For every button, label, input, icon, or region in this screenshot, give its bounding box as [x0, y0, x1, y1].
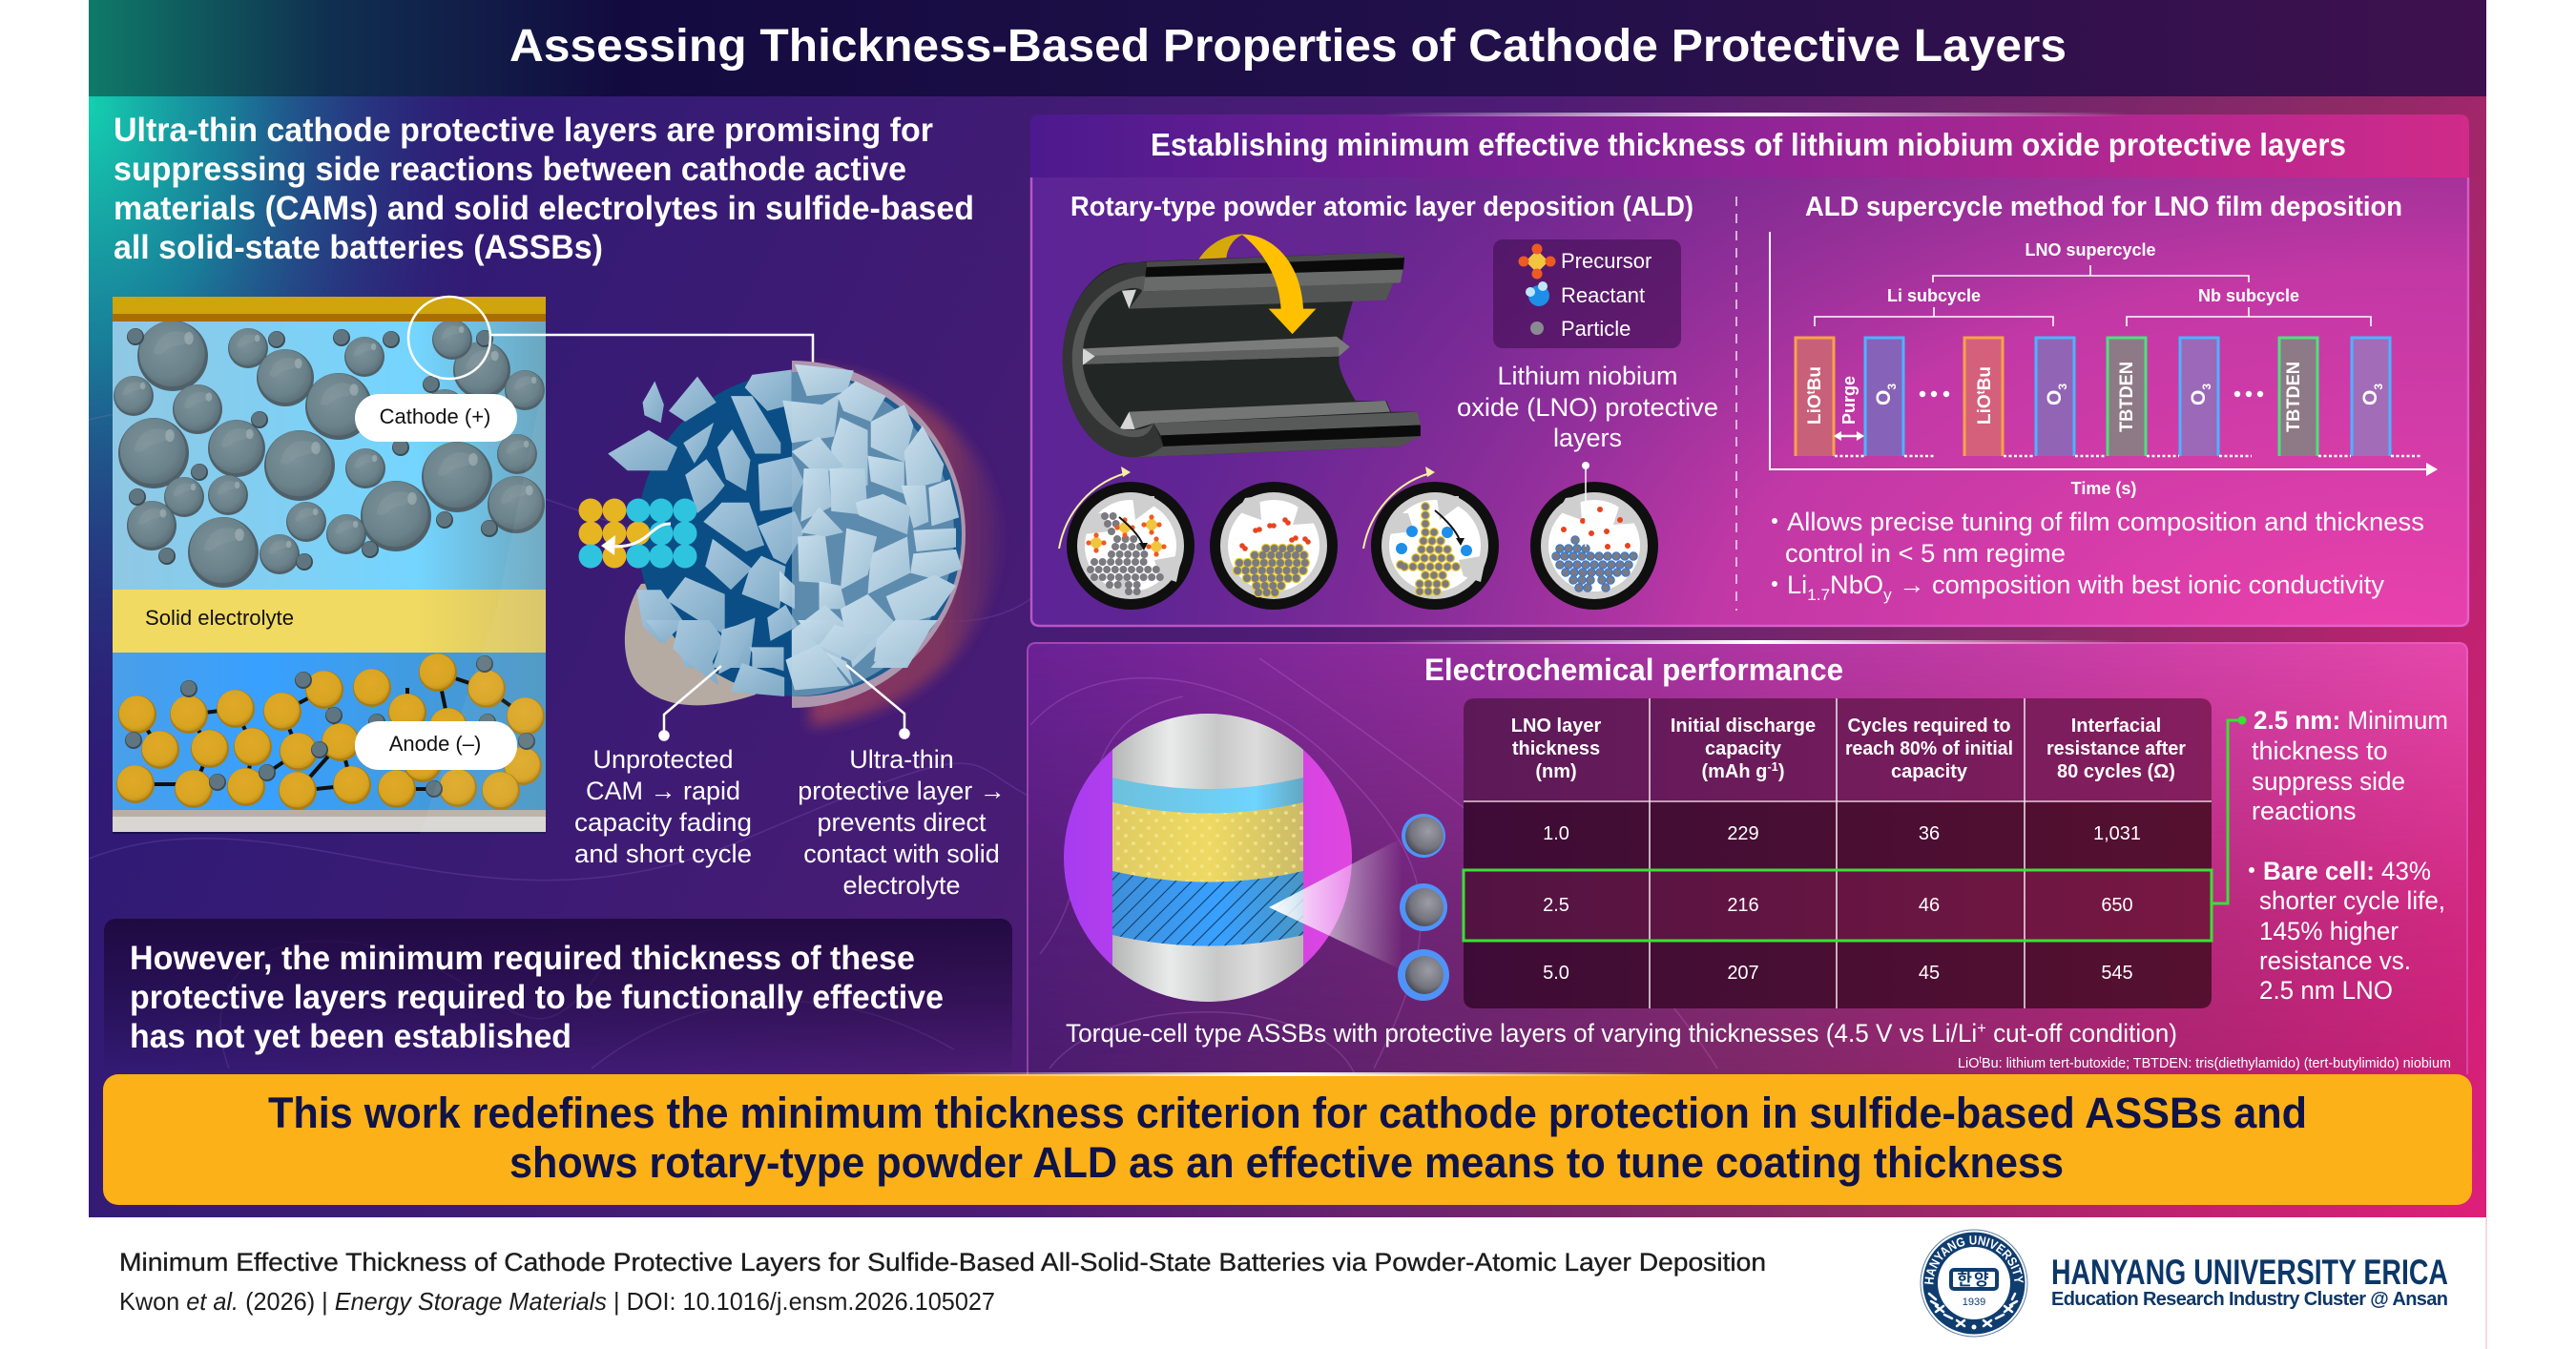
highlight row [1464, 870, 2212, 941]
table header: Cycles required to [1847, 716, 2011, 737]
logo: wordmark: Education Research Industry Cluster @ Ansan [2051, 1289, 2448, 1310]
bar labels: LiO [1805, 394, 1825, 425]
bar labels: O [2188, 390, 2210, 405]
table header [1511, 716, 2186, 782]
particle: 5.0 nm [1398, 949, 1449, 1001]
bar labels: 3 [1885, 384, 1899, 390]
shards [608, 370, 804, 668]
ALD supercycle chart: Nb subcycle [2198, 286, 2299, 305]
citation: Kwon et al. (2026) | Energy Storage Materials | DOI: 10.1016/j.ensm.2026.105027 [119, 1287, 995, 1316]
brackets [1815, 265, 2371, 326]
table header: (mAh g [1701, 761, 1767, 782]
callout leader lines [660, 665, 908, 740]
label: anode: Anode (–) [389, 732, 481, 756]
bar labels: 3 [2200, 384, 2213, 390]
table header: capacity [1705, 738, 1782, 759]
table header: -1 [1767, 759, 1778, 774]
caption: cut-off condition) [1986, 1019, 2177, 1048]
intro text [114, 112, 974, 266]
caption: + [1977, 1019, 1986, 1037]
table header: capacity [1891, 761, 1968, 782]
table rows: 229 [1727, 823, 1759, 844]
ALD bullets: control in < 5 nm regime [1785, 539, 2066, 568]
green connector [2212, 716, 2246, 903]
title: Assessing Thickness-Based Properties of Cathode Protective Layers [509, 21, 2067, 72]
cathode particles [114, 320, 545, 588]
drum 4: LNO coated [1530, 462, 1658, 610]
callout: ultra-thin layer [798, 745, 1006, 900]
bar labels: 3 [2056, 384, 2069, 390]
panel: knowledge gap: protective layers required to be functionally effective [130, 979, 944, 1016]
logo: wordmark: HANYANG UNIVERSITY ERICA [2051, 1253, 2448, 1292]
label: anode [355, 721, 517, 770]
table header: (nm) [1535, 761, 1577, 782]
particle: 1.0 nm [1402, 814, 1445, 858]
citation [119, 1248, 1766, 1316]
bar labels: Bu [1805, 366, 1825, 390]
table rows: 650 [2101, 895, 2133, 916]
logo: university seal: 1939 [1963, 1297, 1985, 1308]
pulse bars [1796, 338, 2390, 456]
callout: unprotected CAM: CAM → rapid [586, 777, 740, 805]
finding: 2.5 nm: reactions [2252, 797, 2357, 825]
panel: establishing minimum thickness [1030, 113, 2469, 627]
logo: university seal: HANYANG UNIVERSITY [1924, 1235, 2024, 1284]
LNO label: oxide (LNO) protective [1457, 393, 1718, 422]
table rows: 545 [2101, 963, 2133, 984]
panel heading: Electrochemical performance [1424, 653, 1843, 687]
table header: LNO layer [1511, 716, 1601, 737]
legend [1493, 239, 1681, 348]
lattice atoms [578, 498, 696, 569]
icon: reactant [1526, 281, 1549, 306]
caption: Torque-cell type ASSBs with protective layers of varying thicknesses (4.5 V vs Li/Li [1066, 1019, 2006, 1048]
finding: bare cell: 145% higher [2259, 917, 2399, 945]
logo: university seal [1920, 1229, 2028, 1338]
table rows: 46 [1919, 895, 1940, 916]
table header: 80 cycles (Ω) [2057, 761, 2175, 782]
zoom cone [1269, 838, 1402, 970]
ALD bullets: → composition with best ionic conductivity [1892, 571, 2384, 599]
legend: Precursor [1561, 249, 1652, 273]
finding: 2.5 nm: suppress side [2252, 767, 2405, 796]
citation: Minimum Effective Thickness of Cathode Protective Layers for Sulfide-Based All-Solid-State Batteries via Powder-Atomic Layer Deposition [119, 1248, 1766, 1276]
finding: bare cell [2249, 857, 2445, 1005]
finding: bare cell: 2.5 nm LNO [2259, 976, 2393, 1005]
table rows: 5.0 [1543, 963, 1569, 984]
bar labels: Bu [1975, 366, 1995, 390]
table rows: 2.5 [1543, 895, 1569, 916]
abbreviations note: Bu: lithium tert-butoxide; TBTDEN: tris(diethylamido) (tert-butylimido) niobium [1982, 1055, 2451, 1071]
intro text: Ultra-thin cathode protective layers are promising for [114, 112, 933, 149]
LNO label: layers [1553, 424, 1622, 452]
table rows: 207 [1727, 963, 1759, 984]
LNO label: Lithium niobium [1497, 362, 1678, 390]
callout: ultra-thin layer: contact with solid [803, 840, 1000, 868]
bar labels: O [2044, 390, 2066, 405]
panel: knowledge gap [104, 919, 1012, 1074]
gas-flow arrow [1045, 359, 1415, 391]
table header: ) [1778, 761, 1785, 782]
table header: Initial discharge [1671, 716, 1816, 737]
panel: knowledge gap: has not yet been established [130, 1018, 571, 1055]
axes [1770, 232, 2438, 476]
background [89, 96, 2486, 1217]
finding: bare cell: resistance vs. [2259, 946, 2411, 975]
rotary reactor tube [1045, 234, 1421, 457]
conclusion banner: shows rotary-type powder ALD as an effective means to tune coating thickness [509, 1138, 2064, 1187]
callout: unprotected CAM: Unprotected [592, 745, 734, 774]
callout: ultra-thin layer: protective layer → [798, 777, 1006, 805]
bar labels: O [1873, 390, 1895, 405]
intro text: all solid-state batteries (ASSBs) [114, 229, 603, 266]
bar labels: Purge [1839, 376, 1859, 425]
ALD bullets [1772, 508, 2424, 604]
ellipses [1920, 391, 2263, 397]
torque cell illustration [1064, 706, 1449, 1011]
finding: 2.5 nm [2252, 706, 2448, 825]
table header: resistance after [2046, 738, 2186, 759]
anode particles [116, 654, 545, 810]
table header: reach 80% of initial [1845, 738, 2013, 759]
conclusion banner: This work redefines the minimum thickness criterion for cathode protection in sulfide-based ASSBs and [268, 1089, 2307, 1137]
magnifier connector [408, 297, 813, 379]
label: cathode [355, 394, 517, 442]
panel: electrochemical performance [1027, 640, 2468, 1081]
callout: ultra-thin layer: prevents direct [817, 808, 987, 837]
logo: university seal: 한양 [1957, 1271, 1991, 1289]
icon: particle [1530, 322, 1544, 335]
bar labels: TBTDEN [2117, 362, 2137, 432]
legend: Reactant [1561, 283, 1645, 307]
ALD supercycle chart [1770, 232, 2438, 498]
panel: knowledge gap: However, the minimum required thickness of these [130, 940, 915, 977]
intro text: materials (CAMs) and solid electrolytes in sulfide-based [114, 190, 974, 227]
particle: 2.5 nm [1400, 883, 1447, 931]
subheading: supercycle: ALD supercycle method for LNO film deposition [1805, 192, 2402, 222]
callout: unprotected CAM: and short cycle [574, 840, 752, 868]
pointer line [1582, 462, 1589, 547]
table header: thickness [1512, 738, 1600, 759]
table rows [1543, 823, 2141, 984]
finding: 2.5 nm: thickness to [2252, 737, 2388, 765]
table rows: 36 [1919, 823, 1940, 844]
bar labels [1804, 362, 2385, 432]
legend: Particle [1561, 317, 1631, 341]
conclusion banner [103, 1072, 2472, 1205]
label: solid electrolyte: Solid electrolyte [145, 606, 294, 630]
purge arrow [1834, 431, 1864, 441]
performance table [1464, 698, 2212, 1008]
drum 2: purge [1210, 482, 1338, 610]
table rows: 1.0 [1543, 823, 1569, 844]
abbreviations note: LiO [1958, 1055, 1980, 1071]
finding: 2.5 nm: 2.5 nm: Minimum [2254, 706, 2448, 735]
header bar [89, 0, 2486, 96]
drum 3: reactant pulse [1363, 467, 1499, 610]
intro text: suppressing side reactions between cathode active [114, 151, 906, 188]
ALD bullets: y [1883, 586, 1892, 604]
ALD bullets: 1.7 [1807, 586, 1830, 604]
magnified cathode particle [578, 361, 1000, 727]
label: cathode: Cathode (+) [380, 405, 490, 428]
callout: unprotected CAM: capacity fading [574, 808, 752, 837]
bar labels: TBTDEN [2284, 362, 2304, 432]
ALD bullets: Allows precise tuning of film composition and thickness [1787, 508, 2424, 536]
table rows: 45 [1919, 963, 1940, 984]
bar labels: LiO [1975, 394, 1995, 425]
ALD bullets: Li [1787, 571, 1807, 599]
bar labels: 3 [2372, 384, 2385, 390]
rotation arrow [1199, 234, 1316, 334]
ALD supercycle chart: Li subcycle [1887, 286, 1981, 305]
finding: bare cell: shorter cycle life, [2259, 886, 2445, 915]
subheading: rotary ALD: Rotary-type powder atomic layer deposition (ALD) [1070, 192, 1693, 222]
callout: ultra-thin layer: electrolyte [842, 871, 961, 900]
callout: ultra-thin layer: Ultra-thin [849, 745, 954, 774]
table header: Interfacial [2071, 716, 2161, 737]
bar labels: O [2359, 390, 2381, 405]
bar labels: t [1804, 390, 1818, 394]
ALD supercycle chart: Time (s) [2071, 479, 2136, 498]
finding: bare cell: Bare cell: 43% [2263, 857, 2431, 885]
battery cross-section [113, 297, 546, 834]
bar labels: t [1974, 390, 1987, 394]
panel heading: Establishing minimum effective thickness of lithium niobium oxide protective layers [1151, 127, 2346, 162]
table rows: 1,031 [2093, 823, 2141, 844]
LNO label [1457, 362, 1718, 452]
ALD supercycle chart: LNO supercycle [2025, 240, 2156, 259]
table rows: 216 [1727, 895, 1759, 916]
drum 1: precursor pulse [1059, 467, 1195, 610]
callout: unprotected CAM [574, 745, 752, 868]
icon: precursor [1519, 244, 1555, 279]
ALD bullets: NbO [1830, 571, 1883, 599]
abbreviations note: t [1979, 1055, 1982, 1066]
logo: wordmark [2051, 1253, 2448, 1310]
